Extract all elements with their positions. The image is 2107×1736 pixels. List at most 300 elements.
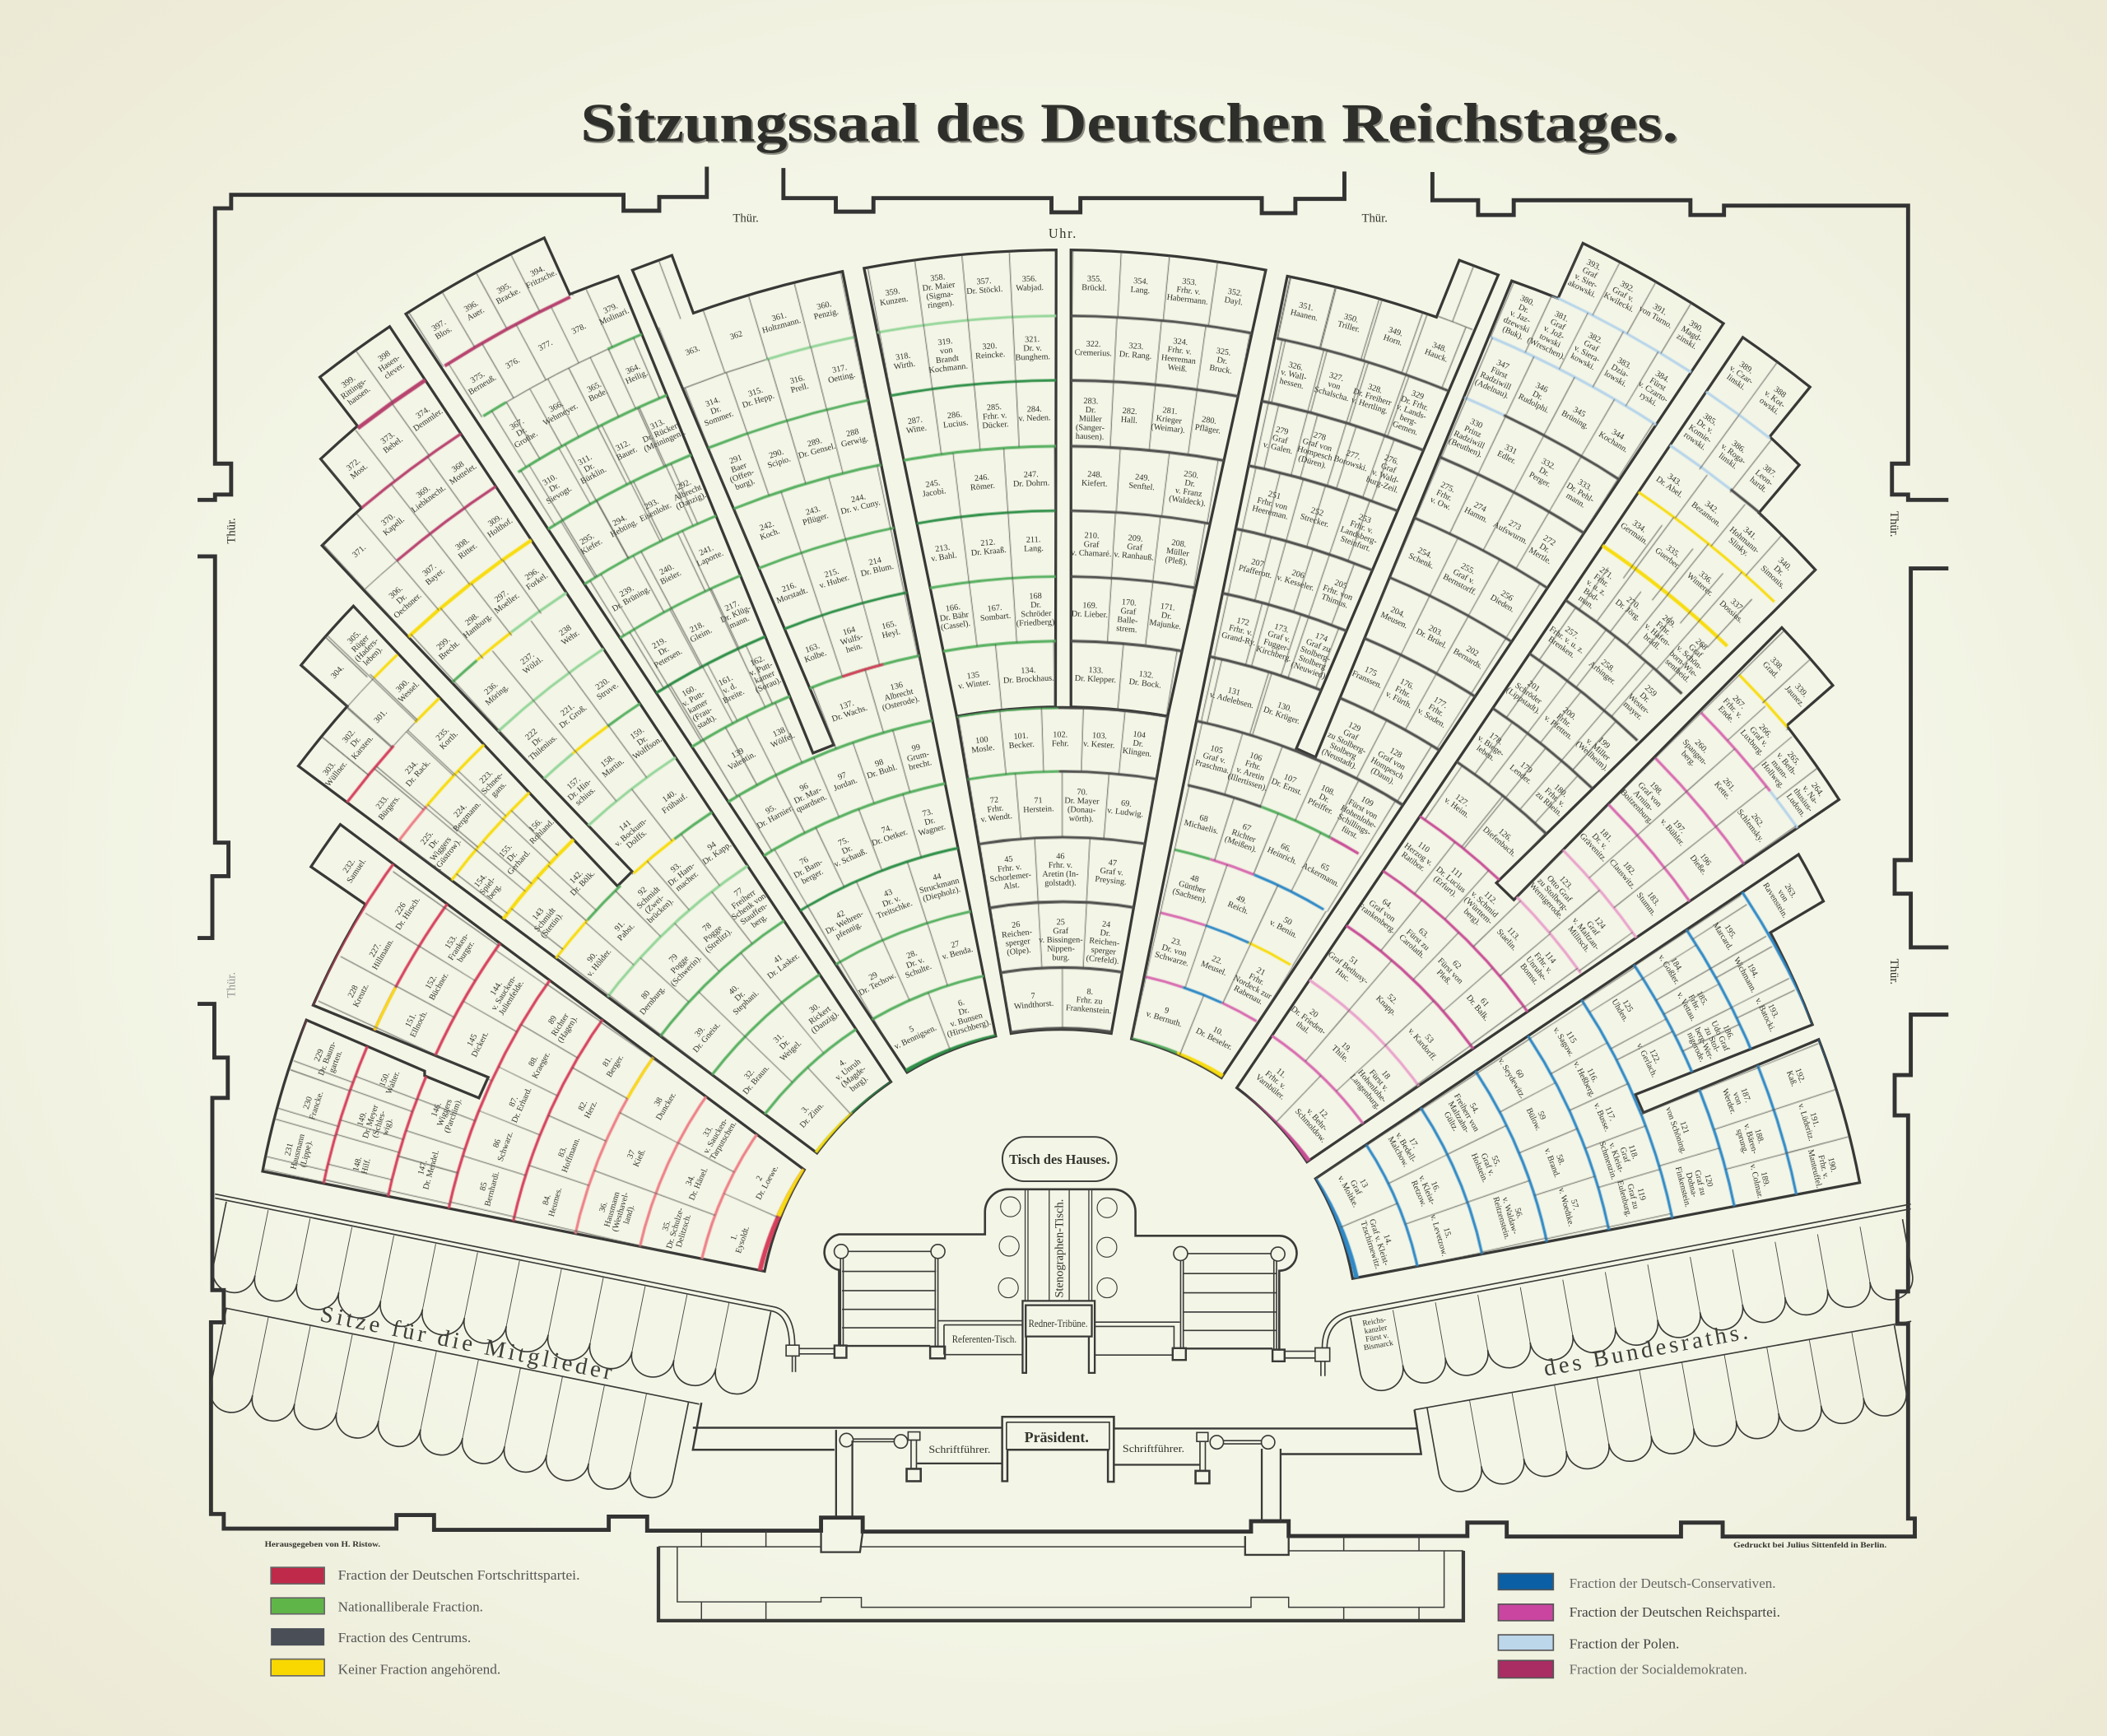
seat block: right wedge B': Militsch. xyxy=(1565,924,1592,954)
seat block: right wedge C': v. Soden. xyxy=(1416,706,1447,730)
seat block: left wedge C (National Liberal): 214 xyxy=(868,556,882,568)
stenographers' table xyxy=(1026,1189,1092,1301)
seat block: right wedge C': v. Siera- xyxy=(1572,343,1602,365)
seat block: left wedge C (National Liberal) xyxy=(406,238,996,1073)
seat block: lower left wedge A (Progressive Party): Dr. Schulze- xyxy=(665,1207,686,1250)
seat block: right wedge B': 342. xyxy=(1703,500,1720,516)
seat block: right wedge C': (Meißen). xyxy=(1223,835,1258,854)
seat block: left wedge B: Mottelet. xyxy=(448,462,478,487)
seat block: right wedge B': Clauswitz. xyxy=(1607,858,1637,891)
seat block: right wedge C': 48 xyxy=(1189,873,1200,884)
seat block: right wedge C': Edler. xyxy=(1495,449,1518,466)
seat block: left wedge C (National Liberal): 136 xyxy=(890,681,904,692)
seat block: left wedge B: 305. xyxy=(346,629,363,646)
seat block: right wedge C': (Wreschen). xyxy=(1526,336,1566,362)
stenographers' table: Stenographen-Tisch. xyxy=(1053,1199,1066,1298)
seat block: right wedge C': Dr. Ernst. xyxy=(1270,777,1304,798)
seat block: central wedge: Windthorst. xyxy=(1014,999,1054,1012)
seat block: lower right wedge A' (Conservatives): Werder. xyxy=(1720,1087,1737,1115)
seat block: left wedge B: 371. xyxy=(351,543,368,560)
seat block: left wedge C (National Liberal): v. Bennigsen. xyxy=(893,1024,938,1052)
seat block: left wedge B: Schmidt xyxy=(533,906,558,933)
seat block: lower left wedge A (Progressive Party): Schwarz. xyxy=(496,1130,515,1163)
seat block: right wedge B': v. Schön- xyxy=(1675,644,1705,673)
legend item: German Conservatives: Fraction der Deutsch-Conservativen. xyxy=(1570,1575,1776,1591)
seat block: left wedge C (National Liberal): 362 xyxy=(729,329,744,342)
seat block: lower right wedge A' (Conservatives): berg-Wer- xyxy=(1692,1026,1715,1061)
seat block: left wedge B: brücken). xyxy=(646,896,676,925)
seat block: central wedge: Reichen- xyxy=(1002,928,1033,940)
seat block: lower right wedge A' (Conservatives): 119 xyxy=(1635,1187,1647,1202)
seat block: right wedge B': 335. xyxy=(1664,543,1681,560)
seat block: upper centre-left wedge: Dr. Maier xyxy=(922,281,956,293)
seat block: right wedge B': Lender. xyxy=(1508,763,1533,786)
seat block: central wedge: Graf xyxy=(1053,927,1069,936)
left railing stub xyxy=(786,1345,835,1372)
seat block: lower right wedge A' (Conservatives): 185. xyxy=(1695,989,1709,1007)
second bench row, right xyxy=(1415,1321,1927,1497)
seat block: left wedge C (National Liberal): 43 xyxy=(882,887,894,899)
seat block: left wedge C (National Liberal): (Sorau). xyxy=(754,676,783,696)
seat block: upper centre-right wedge: Balle- xyxy=(1117,615,1138,626)
seat block: left wedge C (National Liberal): 314. xyxy=(705,395,721,409)
seat block: left wedge C (National Liberal): Dr. Rückert xyxy=(641,421,681,445)
seat block: left wedge C (National Liberal): Dr. xyxy=(548,481,561,494)
table of the house xyxy=(1002,1137,1117,1181)
seat block: right wedge B': 260. xyxy=(1693,738,1709,755)
seat block: right wedge B': Jaunez. xyxy=(1783,684,1807,709)
label: Chancellor seat: kanzler xyxy=(1364,1324,1388,1336)
seat block: left wedge C (National Liberal): v. Putt- xyxy=(748,660,774,678)
seat block: central wedge: 46 xyxy=(1056,852,1064,861)
seat block: right wedge C': Borowski. xyxy=(1333,454,1369,473)
seat block: right wedge B': 182. xyxy=(1621,860,1637,877)
seat block: right wedge B': 334. xyxy=(1630,519,1648,535)
seat block: upper centre-right wedge: 323. xyxy=(1128,342,1144,351)
seat block: central wedge: Frhr. v. xyxy=(1049,861,1072,870)
seat block: right wedge B': Graf von xyxy=(1367,899,1397,924)
seat block: left wedge B: Most. xyxy=(349,462,370,482)
seat block: central wedge: Nippen- xyxy=(1047,944,1075,954)
seat block: left wedge B: Spiel- xyxy=(478,875,498,897)
seat block: left wedge C (National Liberal): 242. xyxy=(759,519,775,533)
seat block: upper centre-right wedge: 249. xyxy=(1135,472,1151,483)
seat block: left wedge C (National Liberal): Baer xyxy=(730,461,748,475)
seat block: right wedge C': Pfeiffer. xyxy=(1306,797,1334,817)
seat block: left wedge C (National Liberal): Dr. v. xyxy=(881,894,902,910)
seat block: upper centre-left wedge: Reincke. xyxy=(975,350,1006,361)
seat block: upper centre-right wedge: Heereman xyxy=(1160,353,1196,366)
seat block: left wedge B: Dr. xyxy=(530,734,544,748)
seat block: right wedge C': 107 xyxy=(1282,772,1297,785)
legend item: Centre: Fraction des Centrums. xyxy=(338,1630,471,1645)
seat block: right wedge B': Graf von xyxy=(1636,780,1663,809)
seat block: right wedge B': Dr. Frieden- xyxy=(1289,1004,1328,1037)
seat block: left wedge C (National Liberal): 99 xyxy=(911,742,921,754)
seat block: upper centre-right wedge: Krieger xyxy=(1156,414,1183,426)
seat block: central wedge: 103. xyxy=(1092,731,1107,741)
seat block: right wedge C': 383. xyxy=(1616,356,1633,371)
seat block: lower right wedge A' (Conservatives): von Schöning. xyxy=(1663,1105,1688,1155)
seat block: right wedge C': v. Fürth. xyxy=(1384,690,1413,710)
seat block: left wedge C (National Liberal): Bode. xyxy=(588,387,609,404)
seat block: right wedge C': 272 xyxy=(1542,533,1557,548)
seat block: lower left wedge A (Progressive Party): 34. xyxy=(685,1174,697,1187)
seat block: central wedge: Herstein. xyxy=(1023,804,1054,815)
seat block: upper centre-left wedge: 211. xyxy=(1026,535,1041,545)
seat block: right wedge C': v. Jož- xyxy=(1542,324,1566,342)
seat block: left wedge C (National Liberal): 215. xyxy=(823,567,840,580)
seat block: right wedge B': Stumm. xyxy=(1635,891,1658,918)
seat block: lower right wedge A' (Conservatives): v. Waldaw- xyxy=(1500,1196,1519,1236)
seat block: right wedge C': kowski. xyxy=(1569,351,1597,372)
seat block: left wedge B: Dr. xyxy=(427,836,441,850)
seat block: left wedge C (National Liberal): hein. xyxy=(845,641,863,655)
seat block: right wedge B': 257. xyxy=(1563,625,1580,641)
seat block: lower right wedge A' (Conservatives): 193. xyxy=(1765,1003,1780,1020)
seat block: left wedge B: (Güstrow). xyxy=(433,837,463,872)
seat block: left wedge C (National Liberal): 5 xyxy=(908,1025,915,1035)
seat block: upper centre-right wedge: Dr. Rang. xyxy=(1119,350,1152,361)
seat block: left wedge C (National Liberal): Dr. Oetker. xyxy=(871,827,909,849)
seat block: right wedge C': Schenk. xyxy=(1407,552,1435,571)
seat block: right wedge B': Frhr. xyxy=(1592,572,1611,589)
seat block: right wedge B': 124 xyxy=(1592,915,1607,931)
seat block: left wedge B: Demmler. xyxy=(412,407,444,434)
seat block: left wedge B: Dr. Lasker. xyxy=(766,952,802,981)
seat block: left wedge C (National Liberal): 97 xyxy=(837,770,848,782)
speaker's tribune xyxy=(1022,1301,1095,1373)
seat block: right wedge C': Meusen. xyxy=(1379,611,1409,631)
seat block: right wedge B': 268 xyxy=(1694,637,1709,652)
seat block: right wedge C': Meusel. xyxy=(1199,960,1228,978)
seat block: upper centre-left wedge: (Cassel). xyxy=(940,619,971,632)
seat block: right wedge C': 344 xyxy=(1610,427,1626,442)
seat block: right wedge B': man. xyxy=(1576,594,1595,611)
seat block: right wedge C': von Turno. xyxy=(1637,305,1674,331)
seat block: left wedge B: Pogge xyxy=(702,924,724,944)
seat block: right wedge B': Staelin. xyxy=(1495,928,1519,952)
seat block: central wedge: Fehr. xyxy=(1052,739,1069,748)
seat block: right wedge C': Frhr. xyxy=(1244,759,1262,772)
seat block: left wedge B: (Haders- xyxy=(353,636,381,663)
seat block: lower right wedge A' (Conservatives): 190. xyxy=(1826,1157,1838,1173)
seat block: upper centre-right wedge: 209. xyxy=(1128,533,1143,544)
seat block: left wedge B: (Stettin). xyxy=(539,911,565,940)
seat block: right wedge B': 110 xyxy=(1416,840,1431,854)
seat block: right wedge C': Perger. xyxy=(1528,470,1552,490)
seat block: left wedge B: Moeller. xyxy=(493,591,521,616)
seat block: left wedge C (National Liberal): 288 xyxy=(845,427,860,439)
seat block: right wedge B': zu Stolberg- xyxy=(1535,877,1570,914)
seat block: right wedge B': Bomst. xyxy=(1518,962,1540,987)
seat block: right wedge B': v. Beth- xyxy=(1774,751,1798,778)
seat block: upper centre-right wedge: v. Ranhauß. xyxy=(1114,550,1154,563)
seat block: right wedge B': 261. xyxy=(1721,776,1737,794)
seat block: lower right wedge A' (Conservatives): 121 xyxy=(1677,1120,1691,1135)
seat block: right wedge B': Slinky. xyxy=(1727,536,1751,558)
seat block: left wedge C (National Liberal): Dr. Wehren- xyxy=(824,909,866,937)
seat block: lower left wedge A (Progressive Party): (Lippe). xyxy=(299,1139,314,1168)
seat block: right wedge B': 267. xyxy=(1731,694,1747,711)
legend item: Social Democrats xyxy=(1498,1660,1747,1678)
seat block: right wedge C': Günther xyxy=(1178,879,1207,896)
seat block: lower right wedge A' (Conservatives): 15. xyxy=(1441,1226,1453,1240)
seat block: left wedge C (National Liberal): 365. xyxy=(586,380,603,395)
seat block: left wedge B: (Magde- xyxy=(840,1064,868,1090)
door and clock labels: Thür. xyxy=(226,972,239,998)
seat block: upper centre-right wedge: (Weimar). xyxy=(1151,422,1185,435)
seat block: left wedge B: 308. xyxy=(454,536,472,552)
seat block: right wedge C': ryski. xyxy=(1638,391,1658,408)
seat block: upper centre-right wedge: 169. xyxy=(1082,601,1097,611)
seat block: central wedge: 25 xyxy=(1057,918,1065,927)
seat block: left wedge C (National Liberal): (Osterode). xyxy=(881,695,921,713)
seat block: right wedge C': Franssen. xyxy=(1351,669,1384,691)
seat block: right wedge C': v. Hertling. xyxy=(1350,396,1389,416)
seat block: lower right wedge A' (Conservatives): Udo Graf xyxy=(1709,1020,1731,1053)
seat block: upper centre-right wedge: Frhr. v. xyxy=(1167,345,1192,357)
seat block: right wedge B': (Erfurt). xyxy=(1431,874,1458,899)
seat block: central wedge: 69. xyxy=(1120,798,1133,809)
seat block: left wedge B: 94 xyxy=(706,840,718,853)
seat block: right wedge B': v. Kardorff. xyxy=(1406,1026,1438,1063)
seat block: right wedge B': hardt. xyxy=(1748,476,1769,495)
seat block: lower left wedge A (Progressive Party): 150. xyxy=(378,1071,392,1088)
seat block: left wedge C (National Liberal): Koch. xyxy=(759,527,781,542)
seat block: left wedge B: 237. xyxy=(519,650,537,667)
seat block: right wedge B': (Weilheim). xyxy=(1574,739,1610,773)
seat block: lower right wedge A' (Conservatives): 189. xyxy=(1759,1171,1771,1188)
seat block: right wedge B': Frhr. v. xyxy=(1542,786,1566,809)
seat block: left wedge B: Bebel. xyxy=(382,435,405,455)
seat block: right wedge B': Bezanson. xyxy=(1690,500,1723,529)
seat block: upper centre-left wedge: 246. xyxy=(974,473,989,483)
seat block: right wedge B': 126. xyxy=(1496,827,1514,844)
seat block: right wedge B': 387. xyxy=(1760,463,1778,479)
legend item: Reich Party xyxy=(1498,1604,1780,1621)
seat block: lower left wedge A (Progressive Party): 151. xyxy=(404,1012,418,1029)
seat block: left wedge C (National Liberal): 366. xyxy=(548,399,565,415)
seat block: left wedge C (National Liberal): 73. xyxy=(922,807,934,819)
seat block: right wedge C': Dieden. xyxy=(1489,593,1516,615)
seat block: right wedge B': Dr. Balk. xyxy=(1464,994,1491,1023)
seat block: central wedge: golstadt). xyxy=(1044,878,1077,888)
seat block: lower left wedge A (Progressive Party): Dr. Erhard. xyxy=(510,1087,534,1124)
seat block: central wedge: 26 xyxy=(1012,920,1021,930)
seat block: left wedge B xyxy=(298,327,891,1153)
seat block: left wedge C (National Liberal): Struckmann xyxy=(919,877,960,896)
seat block: right wedge B': Schröder xyxy=(1514,682,1544,706)
seat block: upper centre-right wedge: Cremerius. xyxy=(1074,348,1112,358)
seat block: left wedge C (National Liberal): Bracke. xyxy=(495,286,522,306)
seat block: left wedge C (National Liberal): Fritzsche. xyxy=(525,268,558,291)
seat block: upper centre-left wedge: 358. xyxy=(930,272,946,283)
seat block: left wedge C (National Liberal): 377. xyxy=(537,338,554,353)
seat block: lower right wedge A' (Conservatives): 118. xyxy=(1626,1143,1640,1161)
seat block: left wedge C (National Liberal): Wehmeyer. xyxy=(542,402,579,428)
seat block: left wedge B: Rohland. xyxy=(528,818,556,846)
seat block: right wedge B': 201 xyxy=(1526,679,1542,694)
seat block: left wedge C (National Liberal): 375. xyxy=(469,370,486,385)
seat block: upper centre-right wedge: Kiefert. xyxy=(1081,479,1108,489)
seat block: right wedge C': Graf xyxy=(1549,318,1567,333)
seat block: right wedge B': 63. xyxy=(1416,927,1430,940)
seat block: left wedge B: Thilenius. xyxy=(528,733,559,763)
president label: Präsident. xyxy=(1025,1429,1089,1445)
seat block: lower left wedge A (Progressive Party): Dr. Meyer xyxy=(361,1103,380,1139)
seat block: lower left wedge A (Progressive Party): 83. xyxy=(557,1145,569,1158)
seat block: right wedge C': Bernards. xyxy=(1452,647,1484,672)
seat block: right wedge B': leben. xyxy=(1475,744,1496,763)
seat block: right wedge C': Graf v. xyxy=(1267,630,1291,645)
seat block: lower right wedge A' (Conservatives): v. Goßler. xyxy=(1656,953,1681,986)
seat block: lower right wedge A' (Conservatives): Gültz. xyxy=(1442,1110,1460,1133)
seat block: right wedge B': Langenburg. xyxy=(1348,1073,1382,1111)
legend right xyxy=(1498,1573,1780,1678)
seat block: right wedge C': 327. xyxy=(1328,371,1345,384)
seat block: right wedge B': Carolath. xyxy=(1397,933,1426,961)
seat block: lower right wedge A' (Conservatives): zu Stol- xyxy=(1702,1026,1722,1054)
seat block: right wedge C': 254. xyxy=(1416,546,1434,561)
seat block: right wedge B': Wester- xyxy=(1626,692,1652,717)
seat block: right wedge C': Frhr. v. xyxy=(1228,623,1254,638)
seat block: right wedge C': Dzia- xyxy=(1609,363,1630,380)
left secretary xyxy=(840,1432,990,1481)
seat block: right wedge C': Rudolphi. xyxy=(1517,393,1551,416)
seat block: left wedge C (National Liberal): Dr. Buhl. xyxy=(866,763,898,781)
seat block: right wedge B': Dr. v. xyxy=(1695,418,1715,436)
seat block: left wedge B: 80 xyxy=(640,989,652,1001)
seat block: right wedge B': 19. xyxy=(1339,1040,1353,1054)
seat block: left wedge B: Möring. xyxy=(484,683,510,708)
seat block: right wedge B': 183. xyxy=(1645,891,1661,908)
seat block: left wedge B: 79 xyxy=(667,952,680,965)
seat block: right wedge B': Frhr. v. xyxy=(1721,696,1744,720)
seat block: left wedge C (National Liberal): 394. xyxy=(529,264,547,279)
seat block: right wedge B': v. Biege- xyxy=(1476,733,1506,759)
seat block: right wedge B': 112. xyxy=(1482,890,1499,906)
seat block: right wedge C': fürst. xyxy=(1340,825,1360,841)
seat block: central wedge: 7 xyxy=(1030,992,1035,1001)
seat block: right wedge C': Dr. xyxy=(1531,389,1544,403)
seat block: right wedge C': 382. xyxy=(1587,331,1604,346)
seat block: right wedge B': Frhr. v. u. z. xyxy=(1547,625,1586,656)
seat block: right wedge C': Brüning. xyxy=(1560,409,1590,431)
seat block: left wedge C (National Liberal): Heilig. xyxy=(624,369,649,386)
seat block: lower right wedge A' (Conservatives): Uhden. xyxy=(1610,998,1630,1023)
seat block: right wedge B': 264. xyxy=(1809,781,1826,798)
seat block: right wedge C': 331 xyxy=(1503,443,1519,457)
seat block: right wedge B': Graf xyxy=(1686,643,1705,660)
label: Chancellor seat: Reichs- xyxy=(1362,1316,1387,1329)
seat block: upper centre-left wedge: Lucius. xyxy=(942,418,969,431)
seat block: left wedge B: (Schwerin). xyxy=(669,954,704,989)
seat block: right wedge B': Dossius. xyxy=(1718,599,1745,625)
seat block: left wedge C (National Liberal): Scipio. xyxy=(766,454,792,471)
seat block: right wedge C': v. Adelebsen. xyxy=(1209,691,1254,710)
seat block: right wedge B': 199 xyxy=(1596,736,1612,751)
seat block: left wedge C (National Liberal): 165. xyxy=(881,619,897,631)
seat block: upper centre-left wedge: v. Bahl. xyxy=(930,551,957,564)
seat block: central wedge: wörth). xyxy=(1069,814,1094,824)
seat block: right wedge B': v. Czar- xyxy=(1728,364,1755,387)
seat block: left wedge C (National Liberal): Dr. Blum. xyxy=(860,562,895,579)
seat block: lower right wedge A' (Conservatives): Eulenburg. xyxy=(1615,1180,1633,1218)
seat block: lower right wedge A' (Conservatives): 13 xyxy=(1357,1178,1370,1189)
seat block: left wedge C (National Liberal): v. Putt- xyxy=(681,689,707,709)
seat block: upper centre-right wedge: Dr. Klepper. xyxy=(1074,674,1116,685)
seat block: left wedge B: Weigel. xyxy=(779,1039,803,1063)
seat block: right wedge C': Graf zu xyxy=(1305,637,1332,654)
seat block: right wedge B': Spangen- xyxy=(1681,738,1709,768)
seat block: left wedge C (National Liberal): (Danzig). xyxy=(675,491,708,512)
seat block: left wedge C (National Liberal): 163. xyxy=(804,641,821,655)
seat block: upper centre-left wedge: 134. xyxy=(1021,666,1036,676)
seat block: left wedge C (National Liberal): 164 xyxy=(842,626,857,638)
seat block: upper centre-left wedge: 357. xyxy=(976,277,992,286)
seat block: upper centre-right wedge: 132. xyxy=(1138,670,1154,681)
seat block: right wedge B': 341. xyxy=(1742,525,1759,542)
seat block: left wedge C (National Liberal): Dr. Gensel. xyxy=(798,442,837,461)
seat block: left wedge C (National Liberal): 42 xyxy=(835,909,846,921)
seat block: left wedge B: 234. xyxy=(403,759,420,776)
seat block: right wedge B': 111 xyxy=(1449,866,1464,881)
seat block: lower left wedge A (Progressive Party): 35. xyxy=(661,1219,672,1232)
legend item: Poles xyxy=(1498,1635,1679,1651)
seat block: lower right wedge A' (Conservatives) xyxy=(1315,854,1860,1278)
president's platform xyxy=(693,1403,1421,1555)
seat block: upper centre-left wedge: 321. xyxy=(1025,335,1040,345)
seat block: left wedge C (National Liberal): Dr. xyxy=(515,426,528,439)
seat block: right wedge C': 256 xyxy=(1499,589,1514,603)
seat block: right wedge B': 339. xyxy=(1793,682,1809,699)
seat block: right wedge C': Stolberg- xyxy=(1299,645,1332,664)
seat block: lower left wedge A (Progressive Party): Hausmann xyxy=(602,1191,621,1228)
seat block: left wedge C (National Liberal): 139 xyxy=(730,747,746,761)
seat block: upper centre-right wedge: 322. xyxy=(1086,340,1101,349)
seat block: lower left wedge A (Progressive Party): Eysoldt. xyxy=(734,1225,751,1254)
seat block: right wedge B': Schmoldow. xyxy=(1293,1107,1328,1144)
seat block: upper centre-right wedge: Senftel. xyxy=(1128,481,1155,492)
seat block: left wedge C (National Liberal): 244. xyxy=(850,492,867,505)
seat block: upper centre-right wedge: 283. xyxy=(1083,397,1099,407)
door and clock labels xyxy=(226,212,1900,998)
seat block: lower right wedge A' (Conservatives): 54. xyxy=(1467,1101,1481,1115)
seat block: left wedge B: 233. xyxy=(374,794,391,811)
seat block: left wedge B: 140. xyxy=(661,789,678,804)
seat block: lower right wedge A' (Conservatives): Bülow. xyxy=(1524,1106,1542,1133)
label: of the Bundesrath: des Bundesraths. xyxy=(1542,1319,1750,1382)
seat block: right wedge C': Hohenlohe- xyxy=(1339,803,1379,831)
seat block: lower left wedge A (Progressive Party): 232. xyxy=(342,858,357,875)
seat block: right wedge B': zu Rhein. xyxy=(1533,790,1564,818)
seat block: left wedge B: 4. xyxy=(838,1058,848,1068)
seat block: left wedge C (National Liberal): Dr. Harnier. xyxy=(756,803,795,831)
seat block: right wedge B': Simonis. xyxy=(1759,564,1787,591)
seat block: left wedge B: 306. xyxy=(388,584,405,601)
seat block: right wedge C': v. Wald- xyxy=(1370,468,1401,486)
seat block: left wedge C (National Liberal): 75. xyxy=(837,835,850,849)
seat block: right wedge C': Horn. xyxy=(1382,333,1403,348)
seat block: right wedge C': Frhr. xyxy=(1393,685,1412,700)
seat block: right wedge C': Dr. xyxy=(1537,466,1551,479)
seat block: upper centre-left wedge: 285. xyxy=(987,403,1002,412)
seat block: left wedge B: Rickert xyxy=(807,1004,833,1026)
seat block: left wedge B: 32. xyxy=(742,1068,756,1082)
seat block: lower right wedge A' (Conservatives): 120 xyxy=(1702,1173,1714,1188)
door and clock labels: Thür. xyxy=(226,518,239,544)
